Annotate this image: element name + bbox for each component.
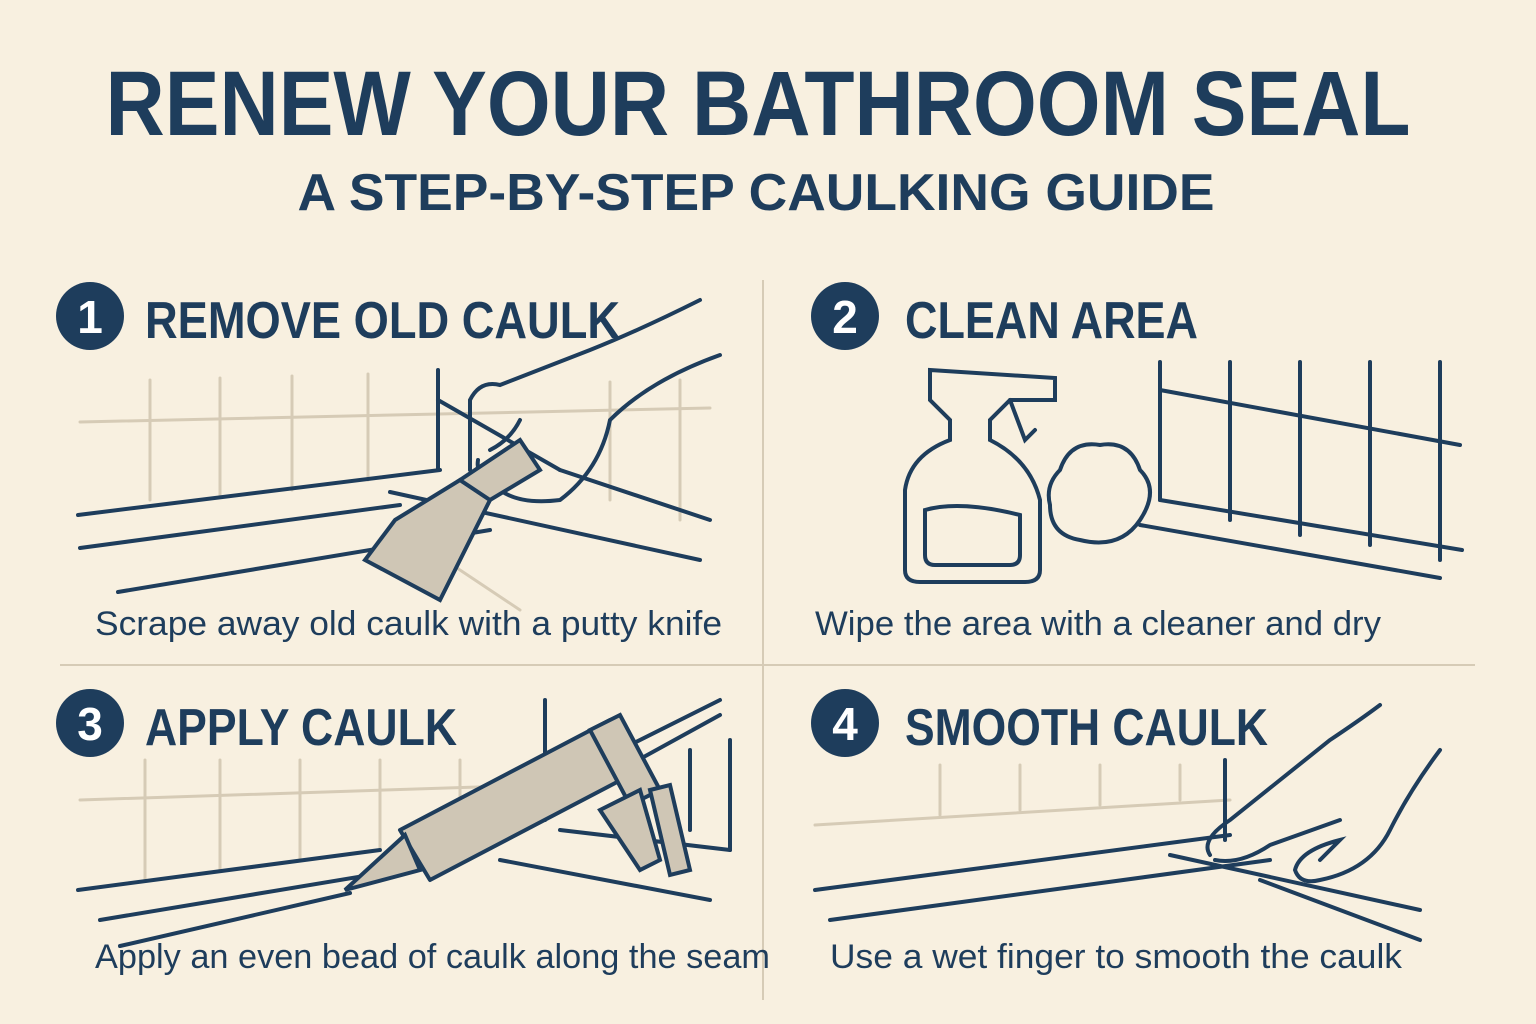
illustration: spray bottle, sponge, tiles [905,362,1462,582]
illustration: caulk gun [78,700,730,946]
step 2 heading: 2 [832,291,858,343]
subtitle: A STEP-BY-STEP CAULKING GUIDE [298,164,1214,222]
step 1 heading: 1 [77,291,103,343]
step 4 heading: 4 [832,698,858,750]
step 2 heading: CLEAN AREA [905,292,1198,350]
illustration: finger smoothing caulk [815,705,1440,940]
step 3 heading: APPLY CAULK [145,699,457,757]
panel: step 2 [811,282,1462,643]
step 3 caption: Apply an even bead of caulk along the seam [95,938,770,976]
panel: step 1 [56,282,722,643]
step 2 caption: Wipe the area with a cleaner and dry [815,605,1381,643]
step 2 heading [811,282,1198,350]
step 4 caption: Use a wet finger to smooth the caulk [830,938,1403,976]
panel: step 4 [811,689,1440,976]
step 3 heading: 3 [77,698,103,750]
title: RENEW YOUR BATHROOM SEAL [106,53,1410,155]
step 1 caption: Scrape away old caulk with a putty knife [95,605,722,643]
step 1 heading: REMOVE OLD CAULK [145,292,620,350]
step 3 heading [56,689,457,757]
panel: step 3 [56,689,770,976]
step 4 heading: SMOOTH CAULK [905,699,1268,757]
step 1 heading [56,282,620,350]
step 4 heading [811,689,1268,757]
illustration: scraping with putty knife [78,300,720,610]
